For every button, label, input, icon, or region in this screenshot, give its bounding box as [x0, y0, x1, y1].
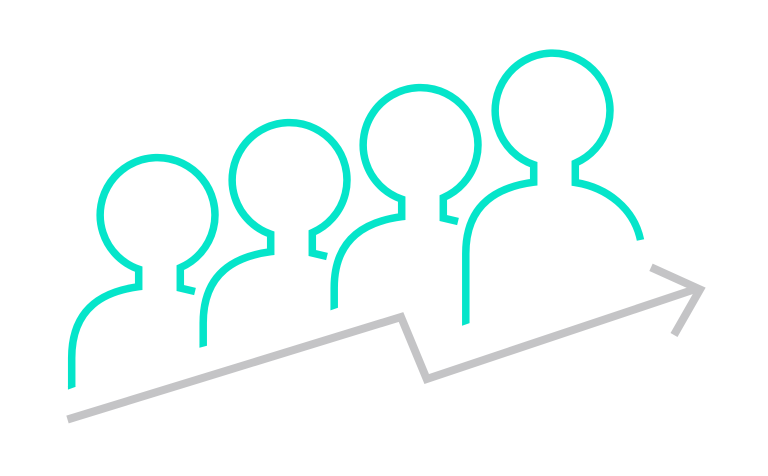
icon: person 2: [199, 123, 347, 348]
icon: rising arrow: [68, 267, 700, 420]
icon: person 3: [330, 88, 478, 310]
icon: person 4: [462, 53, 640, 326]
icon: person 1: [68, 158, 215, 390]
